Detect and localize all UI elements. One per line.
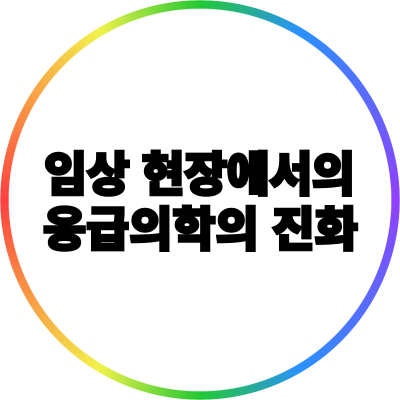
title line 1: 임상 현장에서의 <box>44 148 355 201</box>
title line 2: 응급의학의 진화 <box>43 203 358 256</box>
